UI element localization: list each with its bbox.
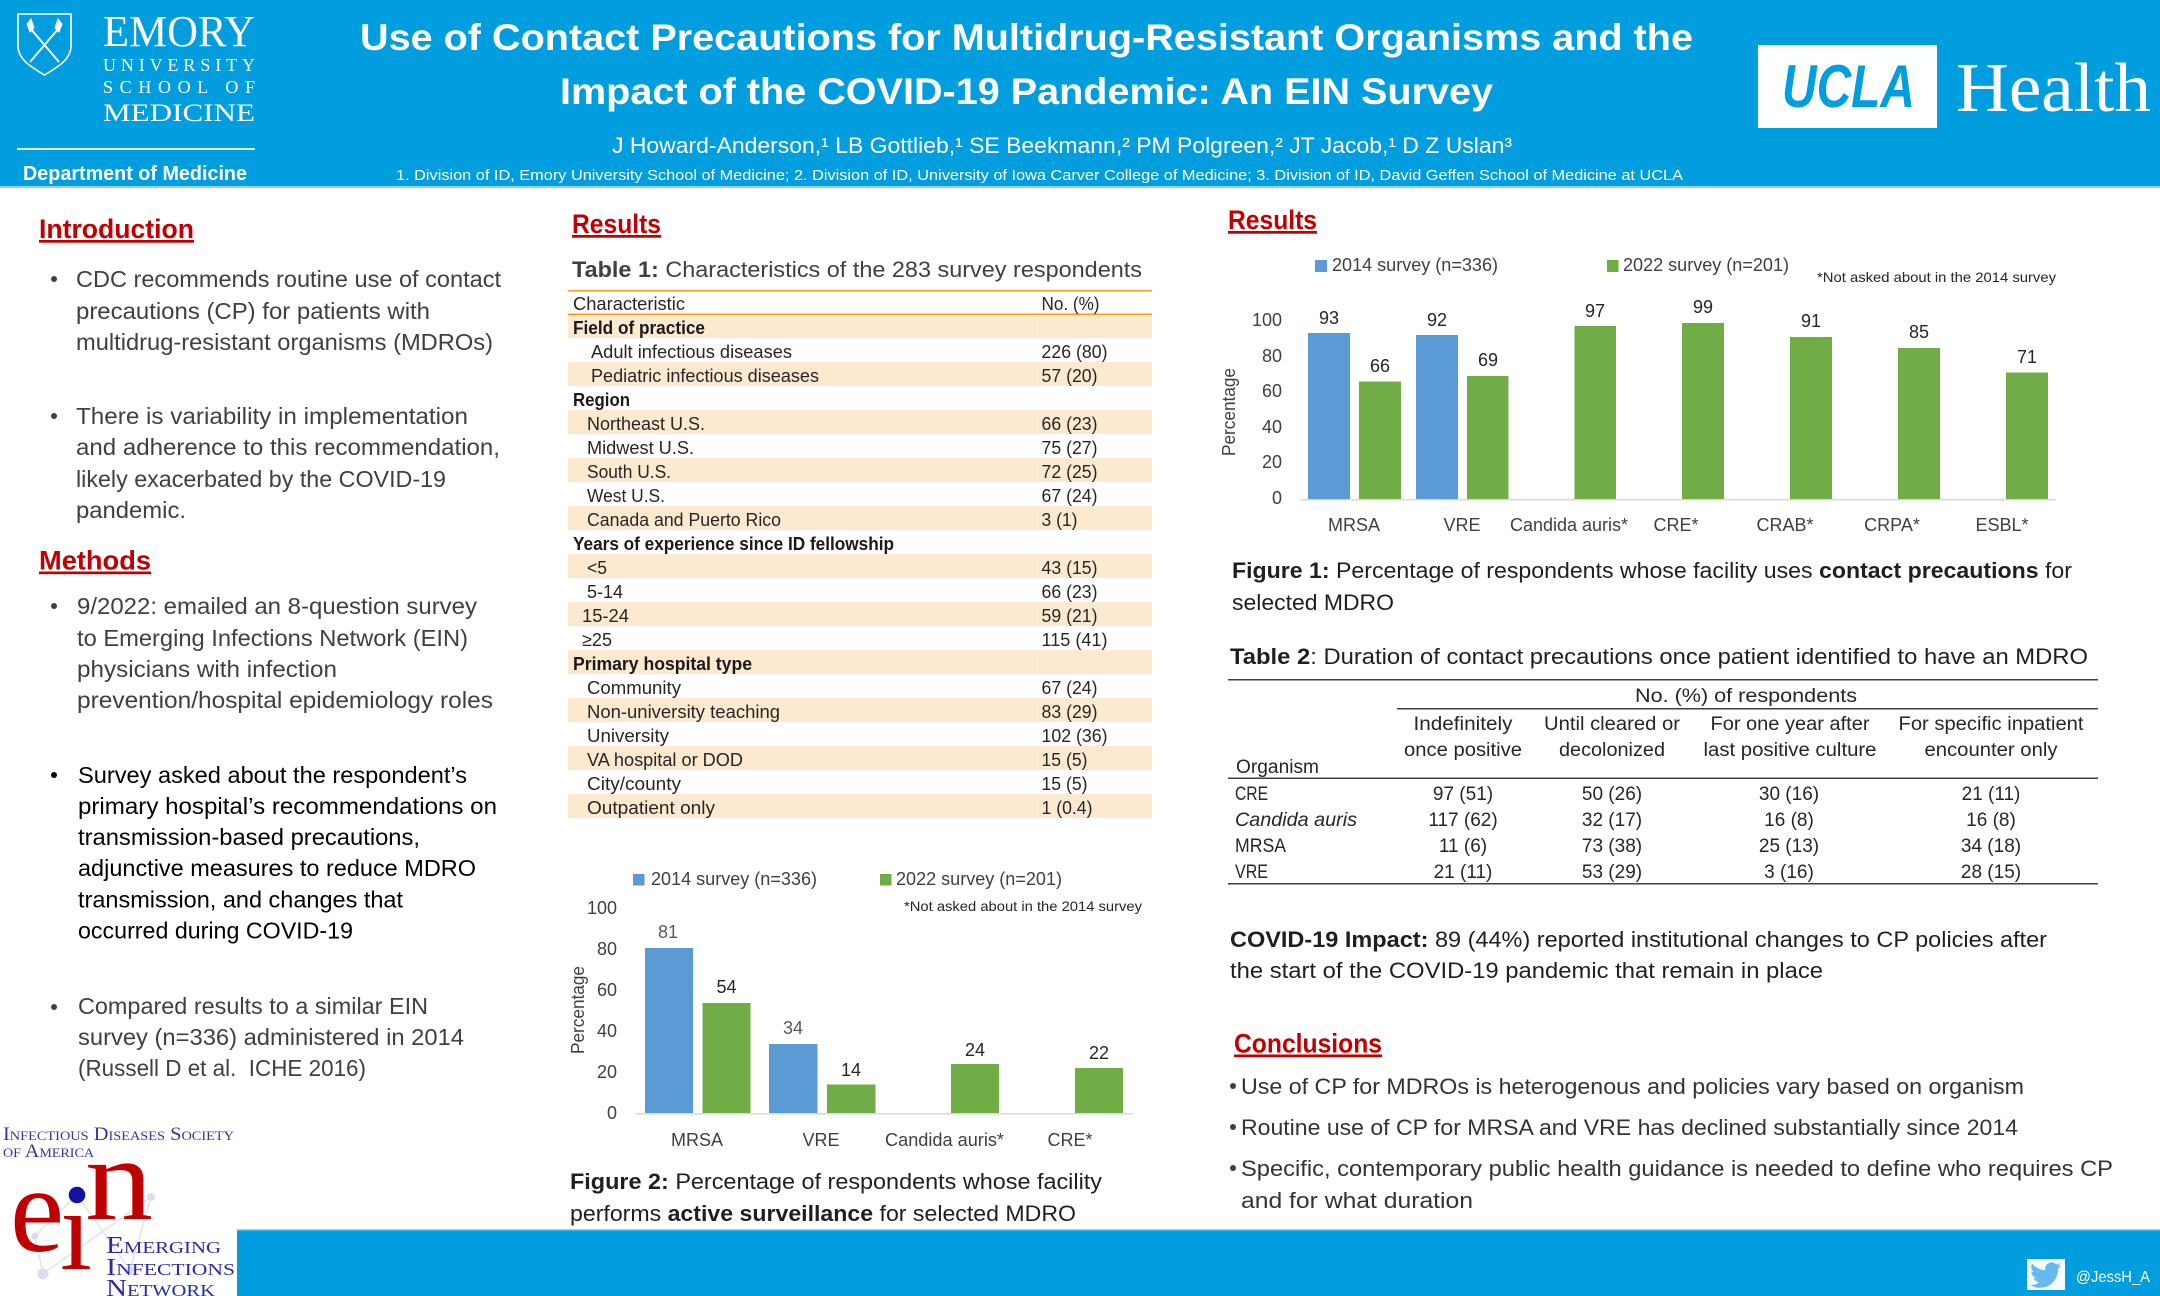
table 2: duration of contact precautions: 11 (6)	[1439, 836, 1487, 857]
bullet: CDC recommendation	[51, 266, 502, 355]
logo: Emory University School of Medicine: SCHOOL OF	[103, 77, 255, 97]
table 2: duration of contact precautions: MRSA	[1235, 836, 1286, 857]
title: Impact of the COVID-19 Pandemic: An EIN Survey	[560, 71, 1493, 112]
bar chart: figure 1 contact precautions: 100	[1252, 310, 1282, 330]
panel: introduction	[39, 214, 502, 523]
logo: IDSA and Emerging Infections Network: n	[85, 1114, 153, 1245]
bar chart: figure 1 contact precautions: 40	[1262, 417, 1282, 437]
table 1: respondent characteristics: 67 (24)	[1042, 485, 1098, 506]
table 1: respondent characteristics: Non-university teaching	[587, 701, 780, 722]
table 2: duration of contact precautions: Indefinitely	[1414, 714, 1513, 735]
table 1: respondent characteristics: 43 (15)	[1042, 557, 1098, 578]
table 2: duration of contact precautions: 30 (16)	[1759, 784, 1819, 805]
table 1: respondent characteristics: City/county	[587, 773, 682, 794]
bullet: survey content: transmission, and changes that	[78, 886, 404, 912]
table 2: duration of contact precautions: 73 (38)	[1582, 836, 1642, 857]
bar chart: figure 2 active surveillance: 60	[597, 980, 617, 1000]
bar chart: figure 1 contact precautions: *Not asked about in the 2014 survey	[1817, 269, 2056, 285]
table 2: duration of contact precautions: 21 (11)	[1434, 862, 1492, 883]
logo: UCLA Health: UCLA	[1782, 53, 1915, 120]
heading: results (middle column): Results	[572, 209, 661, 239]
table 1: respondent characteristics: South U.S.	[587, 461, 671, 482]
bar chart: figure 1 contact precautions	[1219, 255, 2056, 535]
caption: figure 1: Figure 1: Percentage of respondents whose facility uses contact precautions for	[1232, 558, 2072, 583]
table 1: respondent characteristics: Years of experience since ID fellowship	[573, 533, 894, 554]
table 1: respondent characteristics: 1 (0.4)	[1042, 797, 1092, 818]
table 1: respondent characteristics: Region	[573, 389, 630, 410]
logo: Emory University School of Medicine	[17, 7, 255, 185]
bullet: survey emailed: physicians with infection	[77, 656, 337, 682]
bar chart: figure 1 contact precautions: ESBL*	[1975, 515, 2029, 535]
bar chart: figure 2 active surveillance: 40	[597, 1021, 617, 1041]
bar chart: figure 1 contact precautions: 60	[1262, 381, 1282, 401]
bullet: guidance needed	[1230, 1156, 2113, 1213]
heading: introduction: Introduction	[39, 214, 194, 244]
logo: UCLA Health: Health	[1956, 50, 2151, 127]
bullet: CDC recommendation: precautions (CP) for patients with	[76, 298, 430, 324]
caption: figure 2	[570, 1169, 1102, 1226]
affiliations: 1. Division of ID, Emory University School of Medicine; 2. Division of ID, University of Iowa Carver College of Medicine; 3. Division of ID, David Geffen School of Medicine at UCLA	[396, 167, 1683, 184]
table 1: respondent characteristics: Community	[587, 677, 682, 698]
table 2: duration of contact precautions: encounter only	[1924, 740, 2058, 761]
legend: 2022 survey (n=201)	[1623, 255, 1789, 275]
table 2: duration of contact precautions: 25 (13)	[1759, 836, 1819, 857]
bar chart: figure 1 contact precautions: 69	[1478, 350, 1498, 370]
bullet: heterogeneous policies: Use of CP for MDROs is heterogenous and policies vary based on organism	[1241, 1074, 2024, 1099]
table 1: respondent characteristics: Pediatric infectious diseases	[591, 365, 819, 386]
bar chart: figure 2 active surveillance: 14	[841, 1060, 861, 1080]
bar chart: figure 1 contact precautions: 0	[1272, 488, 1282, 508]
bar chart: figure 2 active surveillance: 22	[1089, 1043, 1109, 1063]
bar chart: figure 1 contact precautions: 85	[1909, 322, 1929, 342]
table 2: duration of contact precautions: Candida auris	[1235, 810, 1358, 831]
table 2: duration of contact precautions: Until cleared or	[1544, 714, 1681, 735]
table 1: respondent characteristics: ≥25	[582, 629, 612, 650]
table 2: duration of contact precautions: No. (%) of respondents	[1635, 686, 1857, 707]
bar chart: figure 1 contact precautions: 91	[1801, 311, 1821, 331]
table 1: respondent characteristics: 15 (5)	[1042, 749, 1088, 770]
title: Use of Contact Precautions for Multidrug-Resistant Organisms and the	[360, 17, 1693, 58]
title	[360, 17, 1693, 112]
bar chart: figure 1 contact precautions: 93	[1319, 308, 1339, 328]
table 1: respondent characteristics: Primary hospital type	[573, 653, 752, 674]
table 1 title: Table 1: Characteristics of the 283 survey respondents	[572, 257, 1142, 282]
legend	[1315, 255, 1789, 275]
bar chart: figure 2 active surveillance: MRSA	[671, 1130, 723, 1150]
bar chart: figure 1 contact precautions: 20	[1262, 452, 1282, 472]
table 2: duration of contact precautions: Organism	[1236, 757, 1319, 778]
bullet: comparison to 2014: survey (n=336) administered in 2014	[78, 1024, 464, 1050]
table 1: respondent characteristics: 75 (27)	[1042, 437, 1098, 458]
table 1: respondent characteristics: Field of practice	[573, 317, 705, 338]
bullet: survey emailed: 9/2022: emailed an 8-question survey	[77, 593, 478, 619]
table 2: duration of contact precautions: For one year after	[1710, 714, 1870, 735]
bar chart: figure 1 contact precautions: VRE	[1443, 515, 1481, 535]
bullet: variability: pandemic.	[76, 497, 186, 523]
table 1: respondent characteristics: Characteristic	[573, 293, 685, 314]
heading: results (right column): Results	[1228, 205, 1317, 235]
header banner	[0, 0, 2160, 188]
bar chart: figure 2 active surveillance: CRE*	[1047, 1130, 1093, 1150]
bullet: CDC recommendation: CDC recommends routine use of contact	[76, 266, 502, 292]
table 1: respondent characteristics: 59 (21)	[1042, 605, 1098, 626]
table 2: duration of contact precautions: 21 (11)	[1962, 784, 2020, 805]
bar chart: figure 2 active surveillance: 54	[716, 977, 737, 997]
table 1: respondent characteristics: VA hospital or DOD	[587, 749, 743, 770]
panel: conclusions	[1230, 1028, 2113, 1213]
legend: 2022 survey (n=201)	[896, 869, 1062, 889]
table 2: duration of contact precautions: 16 (8)	[1966, 810, 2016, 831]
bar chart: figure 2 active surveillance: Candida auris*	[885, 1130, 1004, 1150]
table 2: duration of contact precautions: last positive culture	[1704, 740, 1876, 761]
bullet: survey content: primary hospital’s recommendations on	[78, 793, 497, 819]
table 1: respondent characteristics: West U.S.	[587, 485, 665, 506]
table 1: respondent characteristics: 67 (24)	[1042, 677, 1098, 698]
bar chart: figure 2 active surveillance	[568, 869, 1142, 1150]
bar chart: figure 1 contact precautions: Percentage	[1219, 368, 1239, 456]
bar chart: figure 2 active surveillance: 34	[783, 1018, 803, 1038]
table 2: duration of contact precautions: VRE	[1235, 862, 1268, 883]
footer banner	[237, 1229, 2160, 1296]
logo: IDSA and Emerging Infections Network: Infectious Diseases Society	[3, 1125, 235, 1145]
bar chart: figure 1 contact precautions: CRPA*	[1864, 515, 1920, 535]
table 1: respondent characteristics: Midwest U.S.	[587, 437, 694, 458]
logo: IDSA and Emerging Infections Network: Infections	[106, 1255, 235, 1281]
table 2: duration of contact precautions: 32 (17)	[1582, 810, 1642, 831]
table 2: duration of contact precautions: 34 (18)	[1961, 836, 2021, 857]
bar chart: figure 1 contact precautions: 97	[1585, 301, 1605, 321]
bar chart: figure 1 contact precautions: CRE*	[1653, 515, 1699, 535]
caption: figure 1: selected MDRO	[1232, 590, 1394, 615]
table 2: duration of contact precautions: once positive	[1404, 740, 1522, 761]
logo: Emory University School of Medicine: UNIVERSITY	[103, 55, 255, 75]
bullet: survey emailed: to Emerging Infections Network (EIN)	[77, 625, 468, 651]
table 1: respondent characteristics: Outpatient only	[587, 797, 716, 818]
bar chart: figure 1 contact precautions: 80	[1262, 346, 1282, 366]
icon: twitter bird	[2027, 1259, 2065, 1290]
table 2: duration of contact precautions: decolonized	[1559, 740, 1665, 761]
bar chart: figure 2 active surveillance: *Not asked about in the 2014 survey	[904, 898, 1142, 914]
table 1: respondent characteristics: 57 (20)	[1042, 365, 1098, 386]
bar chart: figure 1 contact precautions: 71	[2017, 347, 2037, 367]
bullet: guidance needed: and for what duration	[1241, 1188, 1473, 1213]
table 1: respondent characteristics: No. (%)	[1042, 293, 1100, 314]
bar chart: figure 1 contact precautions: Candida auris*	[1510, 515, 1628, 535]
caption: figure 2: performs active surveillance for selected MDRO	[570, 1201, 1076, 1226]
bar chart: figure 2 active surveillance: VRE	[802, 1130, 840, 1150]
table 2: duration of contact precautions: For specific inpatient	[1898, 714, 2084, 735]
text block: COVID-19 impact: the start of the COVID-19 pandemic that remain in place	[1230, 958, 1823, 983]
table 1: respondent characteristics: 5-14	[587, 581, 623, 602]
bullet: comparison to 2014	[51, 993, 464, 1081]
bullet: comparison to 2014: Compared results to a similar EIN	[78, 993, 428, 1019]
logo: IDSA and Emerging Infections Network	[3, 1114, 235, 1296]
table 1: respondent characteristics: Northeast U.S.	[587, 413, 705, 434]
table 1: respondent characteristics: 15-24	[582, 605, 629, 626]
bar chart: figure 1 contact precautions: CRAB*	[1756, 515, 1814, 535]
table 1: respondent characteristics: 102 (36)	[1042, 725, 1108, 746]
bar chart: figure 1 contact precautions: 66	[1370, 356, 1390, 376]
table 2: duration of contact precautions: 3 (16)	[1764, 862, 1814, 883]
table 2: duration of contact precautions: 50 (26)	[1582, 784, 1642, 805]
heading: methods: Methods	[39, 546, 151, 576]
bullet: survey content: transmission-based precautions,	[78, 824, 420, 850]
table 1: respondent characteristics: 15 (5)	[1042, 773, 1088, 794]
bullet: survey emailed: prevention/hospital epidemiology roles	[77, 687, 493, 713]
logo: Emory University School of Medicine: EMORY	[103, 7, 255, 56]
table 2 title: Table 2 : Duration of contact precautions once patient identified to have an MDRO	[1230, 644, 2088, 669]
caption: figure 2: Figure 2: Percentage of respondents whose facility	[570, 1169, 1102, 1194]
table 1: respondent characteristics: Adult infectious diseases	[591, 341, 792, 362]
table 1: respondent characteristics: 3 (1)	[1042, 509, 1078, 530]
bar chart: figure 2 active surveillance: 81	[658, 922, 678, 942]
twitter handle: @JessH_A	[2076, 1269, 2150, 1286]
icon: Emory shield	[18, 14, 71, 75]
legend: 2014 survey (n=336)	[651, 869, 817, 889]
bullet: survey content: occurred during COVID-19	[78, 918, 353, 944]
bullet: comparison to 2014: (Russell D et al. ICHE 2016)	[78, 1055, 366, 1081]
table 1: respondent characteristics: 83 (29)	[1042, 701, 1098, 722]
bullet: variability: There is variability in implementation	[76, 403, 468, 429]
bar chart: figure 1 contact precautions: 92	[1427, 310, 1447, 330]
table 2: duration of contact precautions: CRE	[1235, 784, 1268, 805]
logo: UCLA Health	[1758, 45, 2151, 128]
table 1: respondent characteristics: University	[587, 725, 670, 746]
table 2: duration of contact precautions	[1228, 679, 2098, 884]
logo: IDSA and Emerging Infections Network: e	[10, 1143, 64, 1278]
authors: J Howard-Anderson,¹ LB Gottlieb,¹ SE Beekmann,² PM Polgreen,² JT Jacob,¹ D Z Uslan³	[612, 133, 1512, 158]
bullet: variability	[51, 403, 500, 523]
bullet: survey emailed	[51, 593, 493, 713]
bullet: survey content: Survey asked about the respondent’s	[78, 762, 467, 788]
legend	[633, 869, 1062, 889]
logo: Emory University School of Medicine: MEDICINE	[103, 100, 255, 127]
bar chart: figure 2 active surveillance: Percentage	[568, 966, 588, 1054]
text block: COVID-19 impact	[1230, 927, 2047, 983]
bullet: guidance needed: Specific, contemporary public health guidance is needed to define who requires CP	[1241, 1156, 2113, 1181]
logo: IDSA and Emerging Infections Network: of America	[3, 1142, 95, 1162]
legend: 2014 survey (n=336)	[1332, 255, 1498, 275]
table 2: duration of contact precautions: 97 (51)	[1433, 784, 1493, 805]
bullet: variability: likely exacerbated by the COVID-19	[76, 466, 446, 492]
logo: IDSA and Emerging Infections Network: ı	[60, 1167, 92, 1294]
bullet: CDC recommendation: multidrug-resistant organisms (MDROs)	[76, 329, 493, 355]
table 1: respondent characteristics: 115 (41)	[1042, 629, 1108, 650]
bullet: decline since 2014: Routine use of CP for MRSA and VRE has declined substantially since 2014	[1241, 1115, 2018, 1140]
bullet: survey content: adjunctive measures to reduce MDRO	[78, 855, 476, 881]
bullet: survey content	[51, 762, 497, 944]
table 1: respondent characteristics: Canada and Puerto Rico	[587, 509, 781, 530]
logo: IDSA and Emerging Infections Network: Emerging	[106, 1233, 221, 1259]
bar chart: figure 2 active surveillance: 24	[965, 1040, 985, 1060]
table 1: respondent characteristics: 226 (80)	[1042, 341, 1108, 362]
table 2: duration of contact precautions: 117 (62)	[1428, 810, 1498, 831]
bar chart: figure 2 active surveillance: 100	[587, 898, 617, 918]
bar chart: figure 2 active surveillance: 0	[607, 1103, 617, 1123]
logo: Emory University School of Medicine: Department of Medicine	[23, 163, 247, 185]
bar chart: figure 2 active surveillance: 80	[597, 939, 617, 959]
bullet: variability: and adherence to this recommendation,	[76, 434, 500, 460]
table 1: respondent characteristics: <5	[587, 557, 607, 578]
table 1: respondent characteristics: 66 (23)	[1042, 413, 1098, 434]
bar chart: figure 1 contact precautions: MRSA	[1328, 515, 1380, 535]
table 2: duration of contact precautions: 16 (8)	[1764, 810, 1814, 831]
table 2: duration of contact precautions: 53 (29)	[1582, 862, 1642, 883]
table 1: respondent characteristics	[568, 290, 1152, 818]
table 1: respondent characteristics: 72 (25)	[1042, 461, 1098, 482]
table 1: respondent characteristics: 66 (23)	[1042, 581, 1098, 602]
caption: figure 1	[1232, 558, 2072, 615]
text block: COVID-19 impact: COVID-19 Impact: 89 (44%) reported institutional changes to CP policies after	[1230, 927, 2047, 952]
heading: conclusions: Conclusions	[1234, 1028, 1382, 1058]
table 2: duration of contact precautions: 28 (15)	[1961, 862, 2021, 883]
bar chart: figure 1 contact precautions: 99	[1693, 297, 1713, 317]
bar chart: figure 2 active surveillance: 20	[597, 1062, 617, 1082]
panel: methods	[39, 546, 497, 1081]
